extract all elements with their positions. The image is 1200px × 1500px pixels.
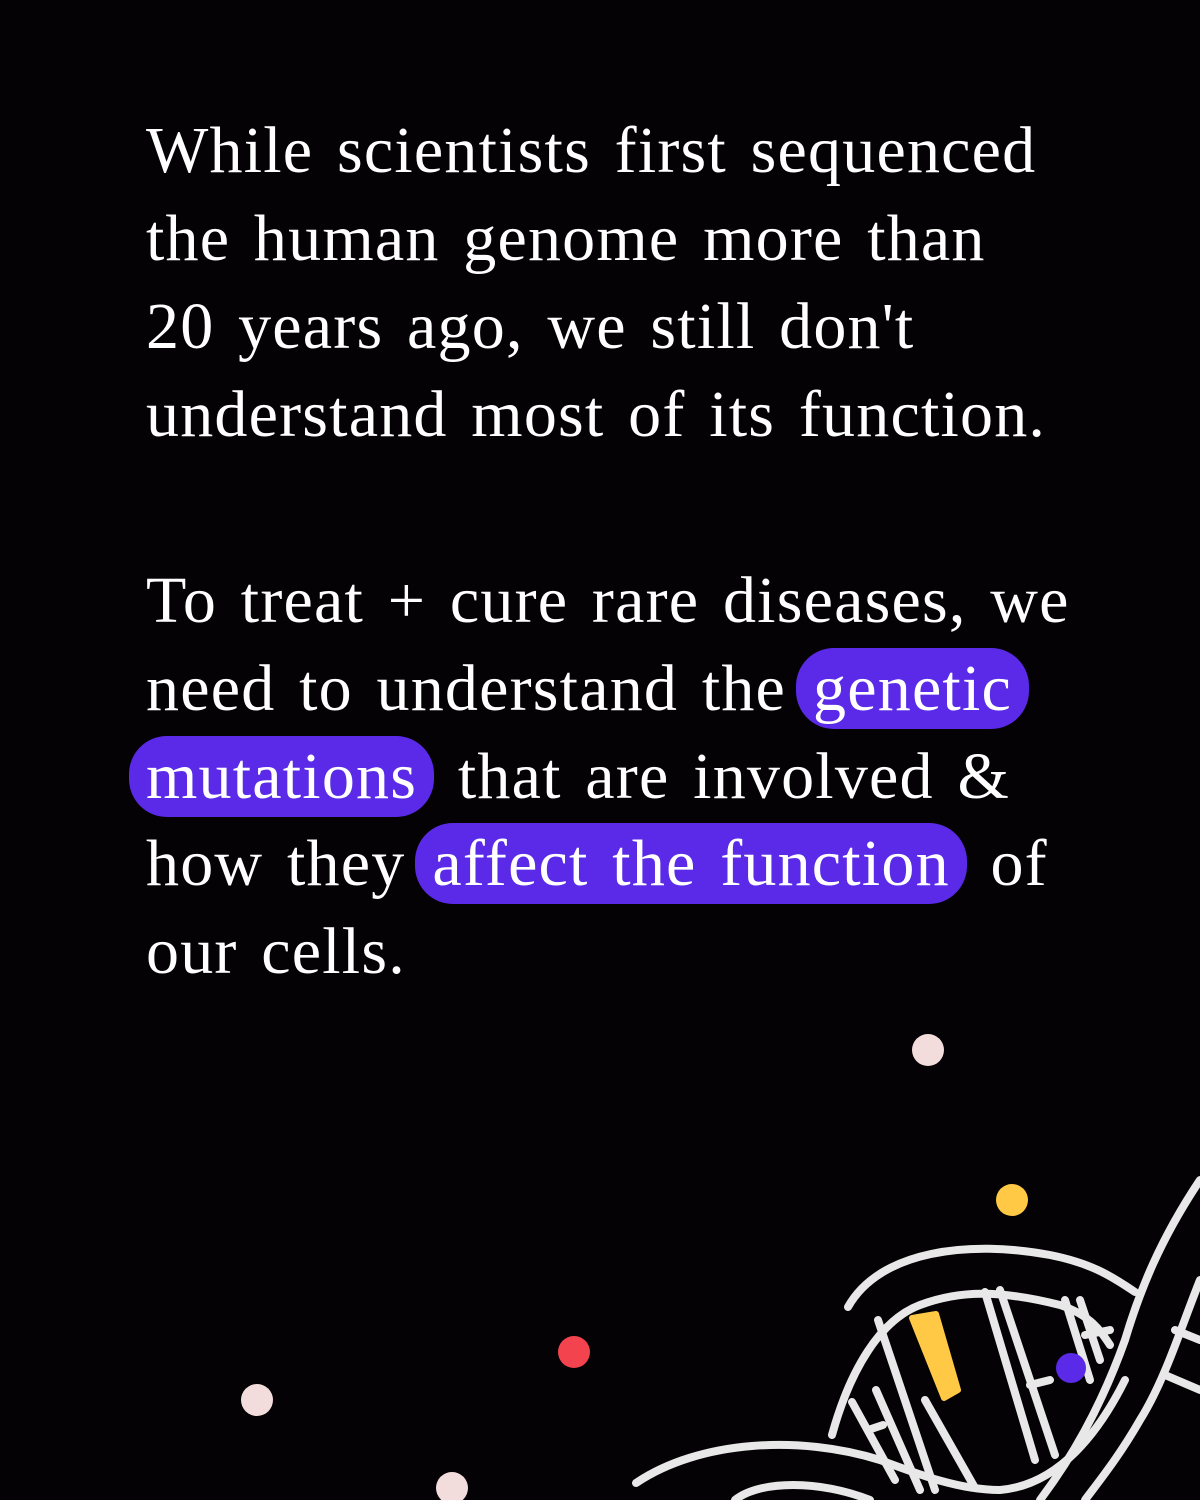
paragraph 1: the human genome more than bbox=[146, 202, 986, 275]
dots bbox=[241, 1034, 1028, 1500]
icon: DNA helix bbox=[636, 1180, 1200, 1500]
yellow bar bbox=[912, 1314, 958, 1398]
highlight: mutations: mutations that are involved & bbox=[146, 740, 1010, 813]
paragraph 1: 20 years ago, we still don't bbox=[146, 290, 914, 363]
highlight: genetic: need to understand the genetic bbox=[146, 652, 1012, 725]
paragraph 1: While scientists first sequenced bbox=[146, 114, 1036, 187]
highlight: affect the function: how they affect the function of bbox=[146, 827, 1048, 900]
paragraph 1: understand most of its function. bbox=[146, 378, 1046, 451]
paragraph 2: To treat + cure rare diseases, we bbox=[146, 564, 1070, 637]
paragraph 1 bbox=[146, 114, 1046, 451]
paragraph 2 bbox=[129, 564, 1070, 988]
purple dot bbox=[1056, 1353, 1086, 1383]
paragraph 2: our cells. bbox=[146, 915, 406, 988]
